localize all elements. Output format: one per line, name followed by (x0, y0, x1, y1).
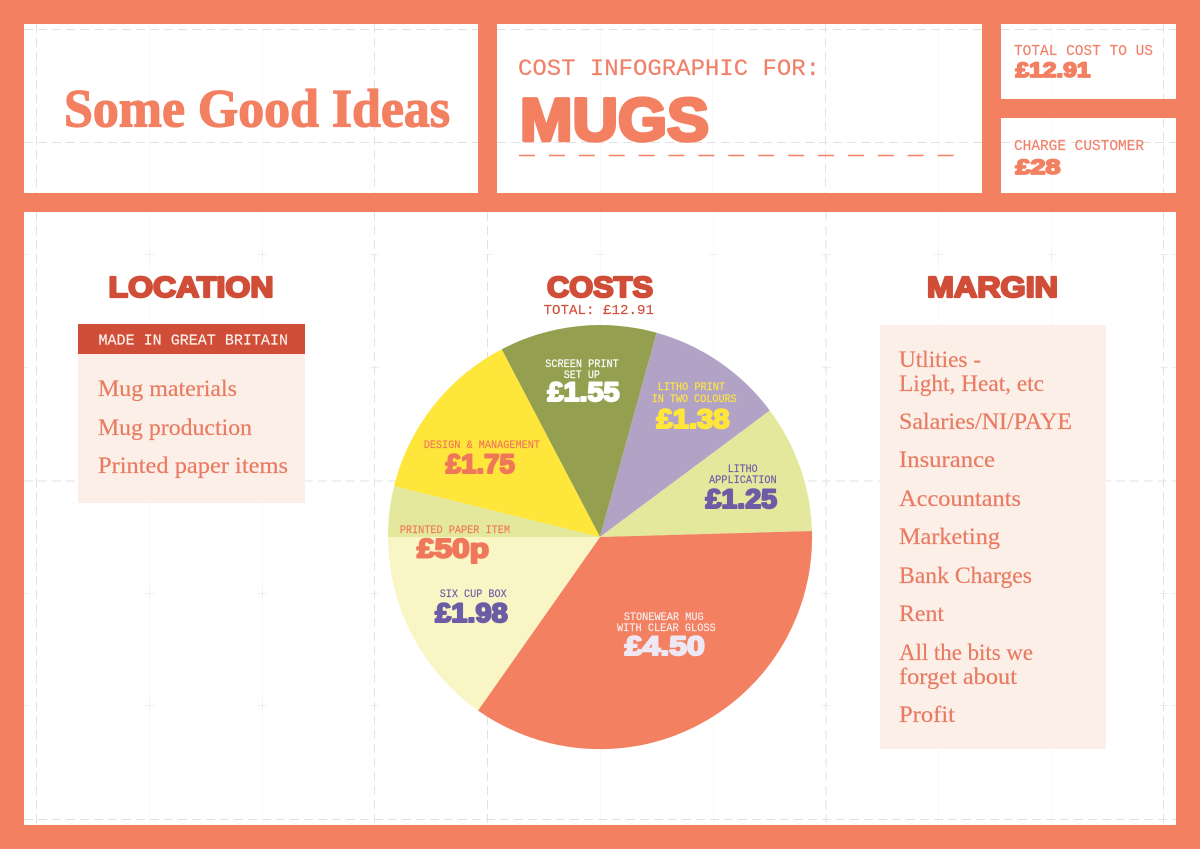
costs heading: COSTS (547, 272, 653, 304)
panel: location (78, 272, 305, 503)
margin list items: Accountants (899, 486, 1021, 512)
label: stoneware mug: STONEWEAR MUG (624, 612, 704, 624)
total cost value: £12.91 (1016, 59, 1091, 82)
logo text: Some Good Ideas (64, 78, 450, 138)
label: litho print: LITHO PRINT (658, 382, 725, 394)
made in great britain banner (78, 324, 305, 354)
label: litho application: APPLICATION (709, 475, 777, 487)
label: litho application: £1.25 (706, 484, 777, 514)
margin list items: Insurance (899, 447, 995, 473)
margin list items: Profit (899, 702, 955, 728)
product name: MUGS (520, 86, 709, 154)
panel: charge customer (1001, 118, 1176, 193)
location list box (78, 354, 305, 503)
dashed rule (519, 155, 955, 156)
label: stoneware mug (617, 612, 716, 661)
margin list items: Marketing (899, 524, 1000, 550)
label: litho application (706, 464, 777, 514)
margin list items: Utlities - (899, 347, 981, 373)
panel: main content (24, 212, 1176, 825)
slice: litho print (600, 333, 770, 537)
label: printed paper item: PRINTED PAPER ITEM (400, 525, 510, 537)
label: screen print: £1.55 (548, 377, 620, 407)
location heading: LOCATION (108, 272, 274, 304)
slice: stoneware mug (478, 531, 812, 749)
label: printed paper item: £50p (417, 534, 489, 564)
panel: costs (388, 272, 812, 749)
slice: litho application (600, 410, 812, 537)
label: screen print: SCREEN PRINT (545, 359, 619, 371)
label: litho print (652, 382, 737, 434)
margin list box (880, 325, 1106, 749)
label: design and management (424, 440, 540, 479)
margin list items: Light, Heat, etc (899, 371, 1044, 397)
location list items (98, 376, 288, 479)
margin heading: MARGIN (927, 272, 1058, 304)
label: six cup box: £1.98 (435, 598, 508, 628)
label: stoneware mug: £4.50 (625, 631, 705, 661)
label: stoneware mug: WITH CLEAR GLOSS (617, 623, 716, 635)
slice: six cup box (388, 537, 600, 710)
panel: logo (24, 24, 478, 193)
label: six cup box: SIX CUP BOX (440, 589, 507, 601)
label: screen print (545, 359, 620, 407)
location list items: Printed paper items (98, 453, 288, 479)
slice: screen print set up (502, 325, 657, 537)
made in great britain banner: MADE IN GREAT BRITAIN (98, 332, 288, 350)
panel: product title (497, 24, 982, 193)
margin list items: Rent (899, 601, 944, 627)
panel: total cost (1001, 24, 1176, 99)
costs total: TOTAL: £12.91 (544, 303, 654, 319)
pie chart (388, 325, 812, 749)
margin list items (899, 347, 1072, 728)
subtitle: COST INFOGRAPHIC FOR: (518, 56, 820, 82)
label: litho print: £1.38 (656, 404, 730, 434)
charge customer label: CHARGE CUSTOMER (1014, 139, 1144, 155)
label: litho application: LITHO (728, 464, 758, 476)
label: litho print: IN TWO COLOURS (652, 394, 737, 406)
location list items: Mug materials (98, 376, 237, 402)
label: design and management: DESIGN & MANAGEMENT (424, 440, 540, 452)
slice: design and management (394, 349, 600, 537)
margin list items: forget about (899, 664, 1017, 690)
label: screen print: SET UP (564, 370, 600, 382)
charge customer value: £28 (1016, 156, 1061, 179)
panel: margin (880, 272, 1106, 749)
margin list items: All the bits we (899, 640, 1033, 666)
location list items: Mug production (98, 415, 252, 441)
label: printed paper item (400, 525, 510, 564)
margin list items: Bank Charges (899, 563, 1032, 589)
total cost label: TOTAL COST TO US (1014, 44, 1153, 60)
margin list items: Salaries/NI/PAYE (899, 409, 1072, 435)
label: design and management: £1.75 (446, 449, 515, 479)
slice: printed paper item (388, 486, 600, 537)
